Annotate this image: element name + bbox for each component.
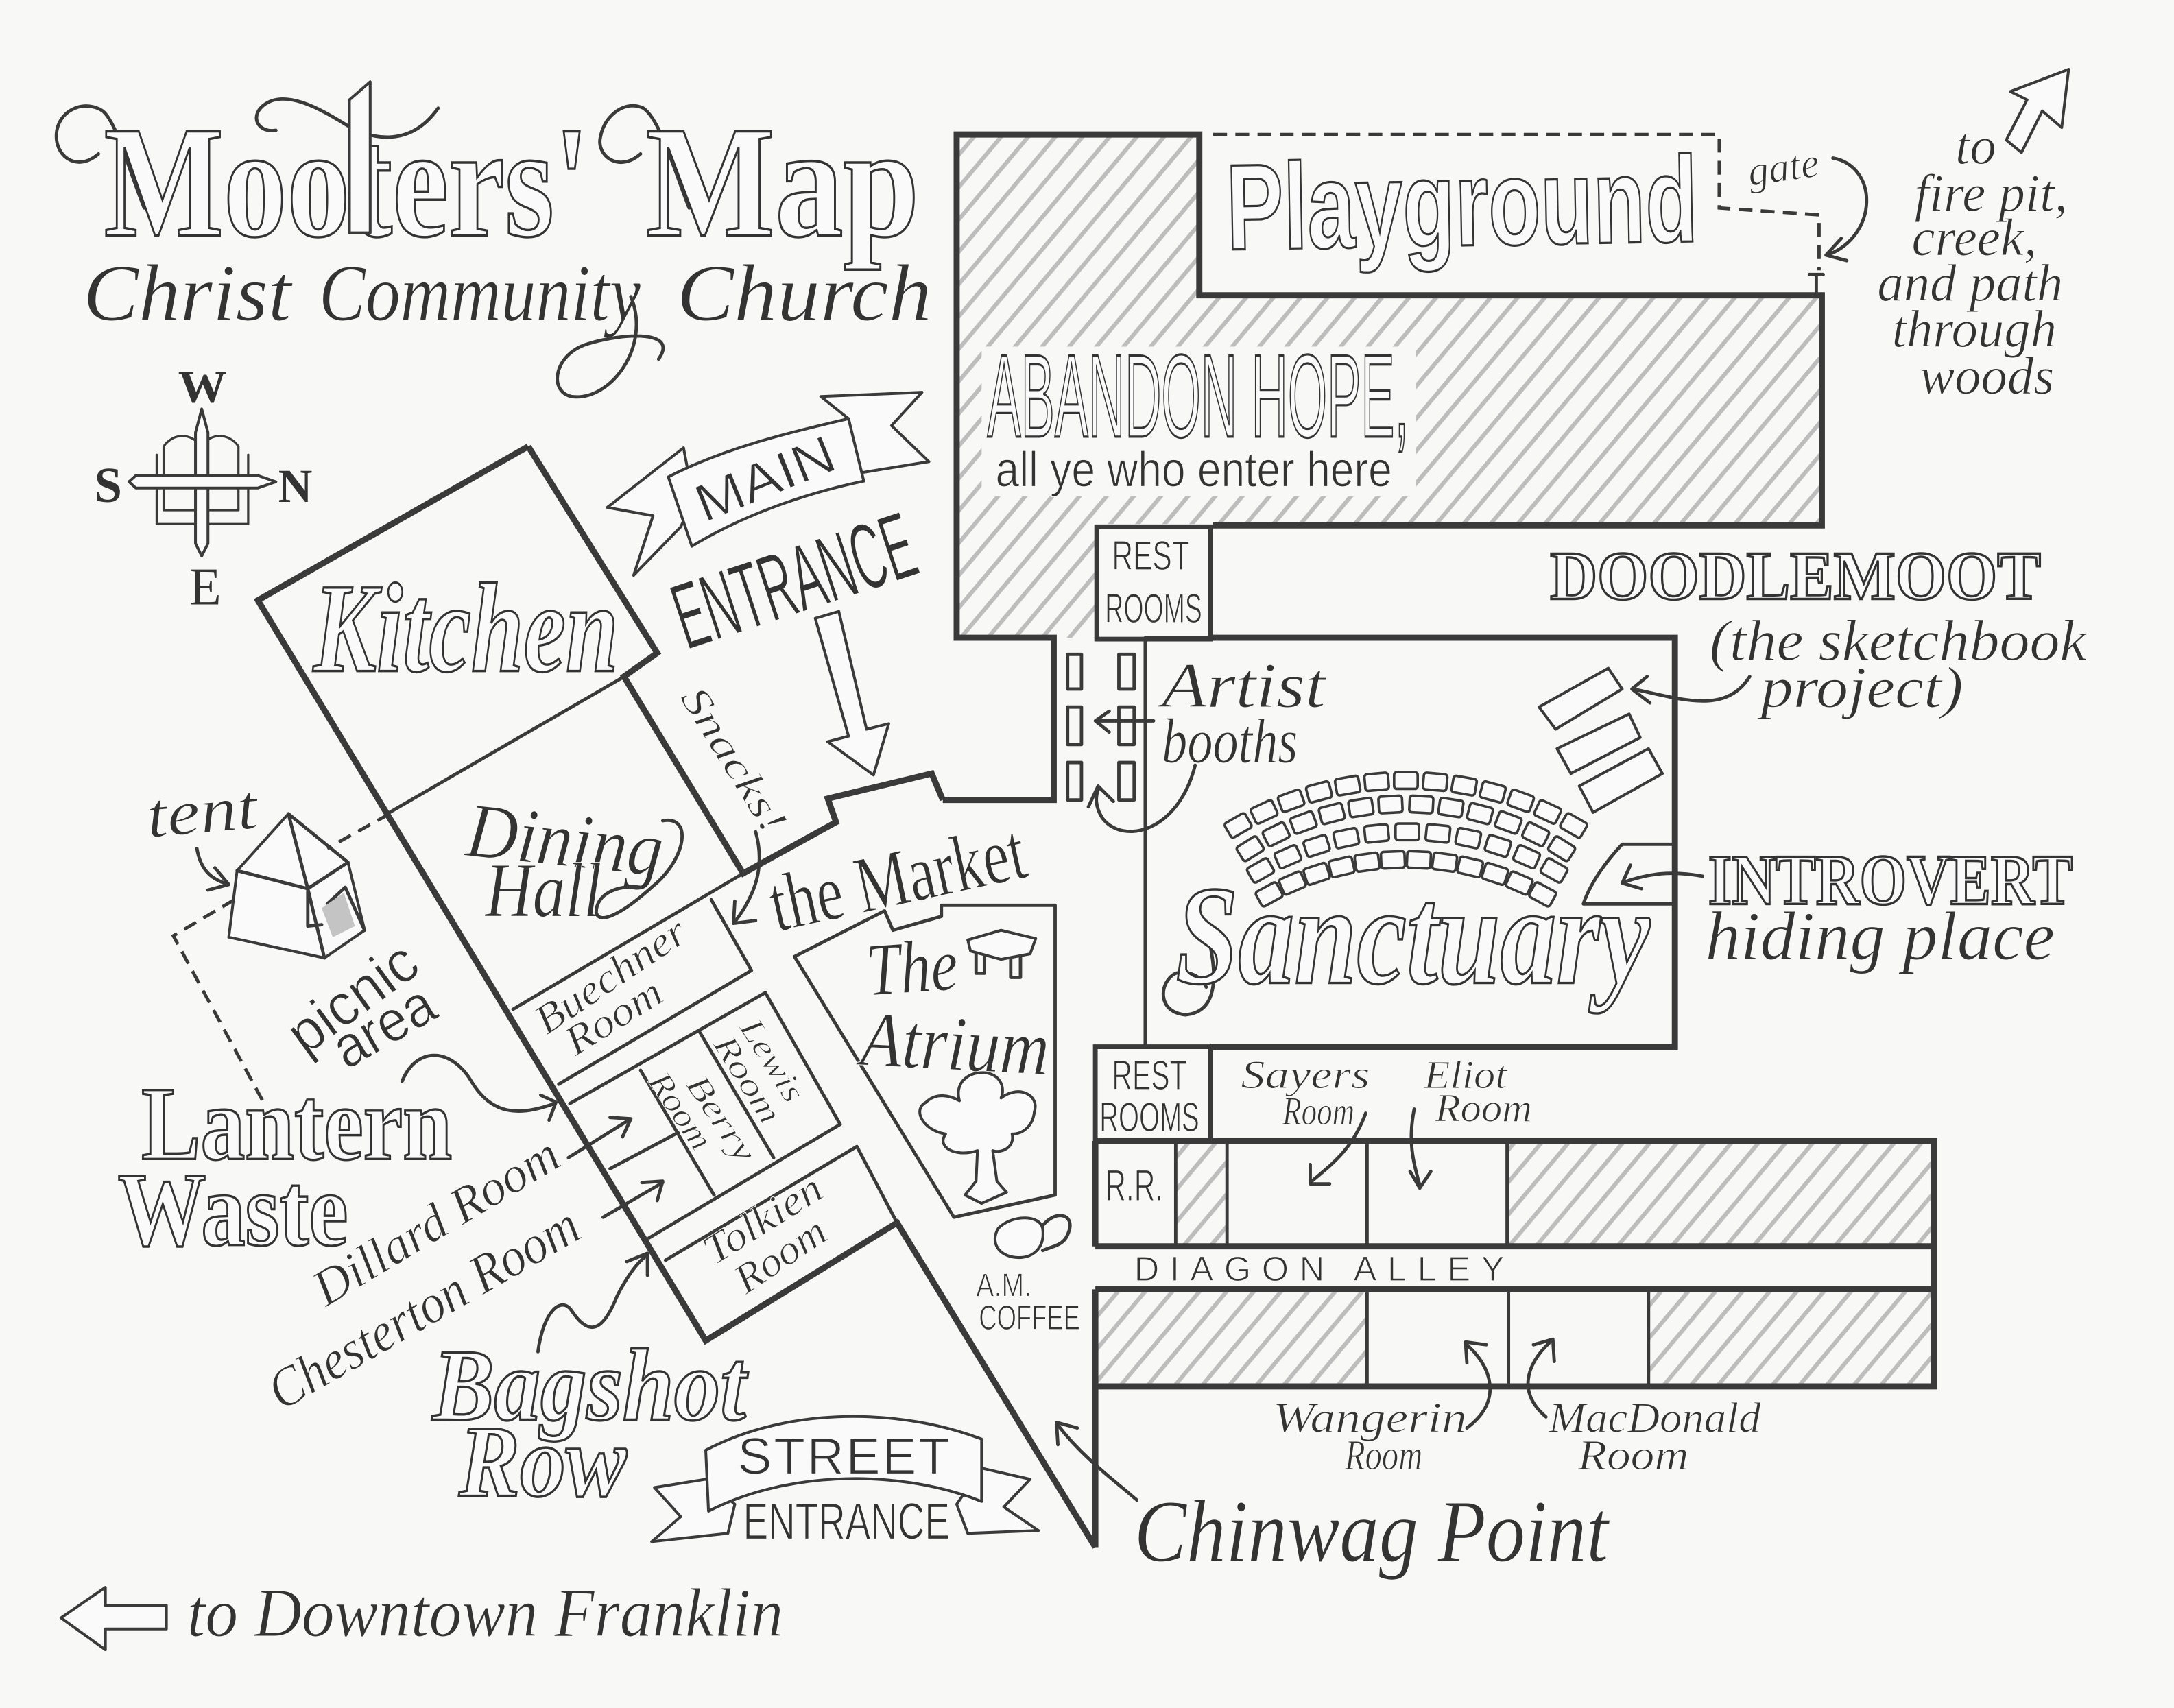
gate post	[1809, 274, 1824, 296]
label: eliot room: Room	[1434, 1086, 1532, 1131]
text: to fire pit: creek,	[1912, 208, 2037, 267]
artist booths	[1068, 654, 1134, 800]
label: gate: gate	[1745, 140, 1822, 195]
heading: introvert: INTROVERT	[1708, 839, 2073, 919]
heading: lantern waste: Lantern	[141, 1066, 452, 1182]
label: tolkien room	[695, 1165, 835, 1303]
rest rooms lower	[1095, 1047, 1210, 1141]
heading: playground: Playground	[1225, 131, 1699, 276]
label: chinwag point: Chinwag Point	[1134, 1482, 1610, 1580]
label: wangerin room	[1273, 1394, 1467, 1479]
text: the sketchbook project: (the sketchbook	[1710, 608, 2088, 673]
label: the atrium: The	[863, 923, 960, 1012]
compass letter E: E	[189, 558, 222, 616]
abandon hope white plate	[981, 346, 1416, 496]
label: picnic area: area	[320, 970, 447, 1081]
text: to fire pit: to	[1955, 117, 1996, 176]
banner: street entrance	[652, 1417, 1038, 1550]
rest rooms lower: REST	[1112, 1052, 1187, 1098]
label: artist booths: booths	[1162, 706, 1298, 777]
rest rooms lower: ROOMS	[1099, 1094, 1199, 1140]
banner: main entrance	[607, 392, 929, 575]
arrow: snacks	[733, 832, 759, 924]
label: eliot room: Eliot	[1423, 1053, 1508, 1097]
label: picnic area: picnic	[274, 928, 430, 1066]
dashed picnic boundary	[174, 814, 390, 1102]
arrow: doodlemoot	[1632, 677, 1749, 703]
label: snacks: Snacks!	[672, 678, 796, 841]
classroom dividers	[1175, 1141, 1649, 1386]
label: the atrium: Atrium	[855, 996, 1051, 1092]
label: diagon alley: DIAGON ALLEY	[1134, 1249, 1505, 1288]
title: Mooters'	[104, 95, 589, 271]
label: berry room: Berry	[679, 1068, 763, 1169]
label: dining hall: Hall	[484, 847, 601, 933]
rest rooms upper: REST	[1112, 532, 1190, 579]
label: macdonald room	[1548, 1394, 1761, 1479]
label: sayers room: Room	[1282, 1089, 1354, 1133]
label: lewis room	[706, 1011, 812, 1130]
icon: table	[968, 930, 1036, 977]
text: to fire pit	[1877, 117, 2068, 405]
arrow: chesterton	[603, 1181, 662, 1217]
text: hiding place: hiding place	[1706, 898, 2055, 974]
compass letter W: W	[178, 362, 227, 412]
arrow: sayers	[1310, 1114, 1365, 1184]
label: dillard room: Dillard Room	[302, 1126, 569, 1318]
heading: bagshot row: Row	[458, 1406, 628, 1519]
compass letter N: N	[278, 460, 312, 512]
compass	[94, 362, 312, 616]
text: the sketchbook project: project)	[1757, 655, 1963, 720]
rest rooms upper: ROOMS	[1105, 585, 1202, 632]
label: a.m. coffee: A.M.	[976, 1266, 1031, 1303]
icon: tree	[920, 1072, 1036, 1203]
arrows: artist booths	[1088, 711, 1195, 832]
subtitle: Christ	[83, 250, 293, 338]
label: tent: tent	[143, 771, 262, 852]
text: all ye who enter here: all ye who enter here	[996, 442, 1392, 498]
label: berry room: Room	[641, 1065, 719, 1157]
heading: kitchen: Kitchen	[312, 558, 619, 699]
label: wangerin room: Room	[1344, 1431, 1422, 1479]
heading: lantern waste: Waste	[118, 1152, 348, 1268]
playground dashed fence	[1213, 134, 1819, 270]
text: to fire pit: fire pit,	[1914, 164, 2068, 222]
panel: rooms walls	[513, 874, 897, 1260]
kitchen dining divider	[390, 675, 627, 813]
text: to fire pit: through	[1892, 300, 2057, 358]
text: to downtown franklin: to Downtown Franklin	[187, 1574, 783, 1651]
banner: street entrance: ENTRANCE	[743, 1492, 950, 1550]
label: R.R.: R.R.	[1105, 1160, 1163, 1210]
introvert hiding spot	[1584, 844, 1673, 904]
panel: classroom hatching	[1097, 1142, 1933, 1385]
title	[56, 82, 919, 271]
arrow: chinwag	[1057, 1422, 1137, 1500]
label: sayers room	[1241, 1053, 1370, 1133]
heading: lantern waste	[118, 1066, 452, 1268]
heading: bagshot row: Bagshot	[431, 1329, 749, 1442]
label: chesterton room: Chesterton Room	[257, 1194, 590, 1422]
label: sayers room: Sayers	[1241, 1053, 1370, 1097]
label: macdonald room: Room	[1577, 1431, 1688, 1479]
label: buechner room: Buechner	[526, 909, 695, 1044]
panel: north wing walls	[943, 134, 1821, 800]
arrow: introvert	[1622, 865, 1703, 889]
label: the atrium	[855, 923, 1051, 1092]
label: a.m. coffee	[976, 1266, 1080, 1337]
seating rows	[1223, 772, 1588, 907]
panel: atrium	[794, 905, 1055, 1217]
arrow: macdonald	[1528, 1339, 1554, 1417]
label: artist booths: Artist	[1157, 651, 1327, 721]
icon: pencil horizontal	[129, 476, 276, 488]
heading: bagshot row	[431, 1329, 749, 1519]
text: to fire pit: woods	[1920, 347, 2054, 405]
label: lewis room: Lewis	[732, 1011, 812, 1109]
title: Map	[646, 95, 919, 271]
heading: sanctuary: Sanctuary	[1175, 857, 1651, 1014]
text: ABANDON HOPE,	[987, 330, 1409, 462]
label: dining hall: Dining	[462, 787, 667, 893]
panel: west building outline	[258, 446, 1095, 1547]
label: tolkien room: Room	[725, 1208, 835, 1303]
panel: sanctuary walls	[1210, 638, 1675, 1047]
sanctuary west wall	[1145, 638, 1213, 1047]
label: tolkien room: Tolkien	[695, 1165, 831, 1274]
subtitle: Community	[319, 250, 641, 338]
panel: classroom walls	[1095, 1141, 1934, 1547]
subtitle: Church	[677, 250, 932, 338]
label: artist booths	[1157, 651, 1327, 777]
label: buechner room: Room	[556, 969, 671, 1065]
rest rooms upper	[1097, 527, 1210, 639]
doodlemoot tables	[1539, 669, 1662, 813]
arrow: main entrance	[815, 612, 889, 775]
arrow: wangerin	[1466, 1342, 1490, 1428]
icon: open book	[156, 436, 248, 524]
compass letter S: S	[94, 457, 122, 513]
text: entrance: ENTRANCE	[660, 492, 929, 670]
label: a.m. coffee: COFFEE	[979, 1298, 1080, 1337]
kitchen east wall	[528, 446, 943, 874]
label: wangerin room: Wangerin	[1273, 1394, 1467, 1442]
label: lewis room: Room	[706, 1028, 789, 1130]
icon: pencil vertical	[195, 409, 208, 556]
arrow: eliot	[1410, 1109, 1431, 1188]
label: eliot room	[1423, 1053, 1532, 1131]
icon: tent	[229, 814, 365, 958]
subtitle	[83, 250, 932, 397]
text: the sketchbook project	[1710, 608, 2088, 720]
label: the market: the Market	[761, 808, 1034, 949]
panel: north wing hatched hall	[959, 136, 1820, 638]
heading: doodlemoot: DOODLEMOOT	[1550, 537, 2041, 614]
arrow: tent	[197, 848, 229, 890]
icon: left arrow	[61, 1587, 167, 1650]
banner: street entrance: STREET	[738, 1427, 950, 1484]
arrow: dillard	[569, 1118, 631, 1157]
text: to fire pit: and path	[1877, 254, 2063, 313]
arrow: bagshot	[538, 1253, 647, 1351]
label: berry room	[641, 1065, 763, 1169]
banner: main entrance: MAIN	[686, 424, 844, 533]
icon: arrow to fire pit	[2006, 69, 2068, 152]
arrow: picnic area	[402, 1055, 556, 1120]
label: macdonald room: MacDonald	[1548, 1394, 1761, 1442]
icon: coffee cup	[995, 1216, 1070, 1258]
arrow: gate	[1826, 158, 1867, 261]
